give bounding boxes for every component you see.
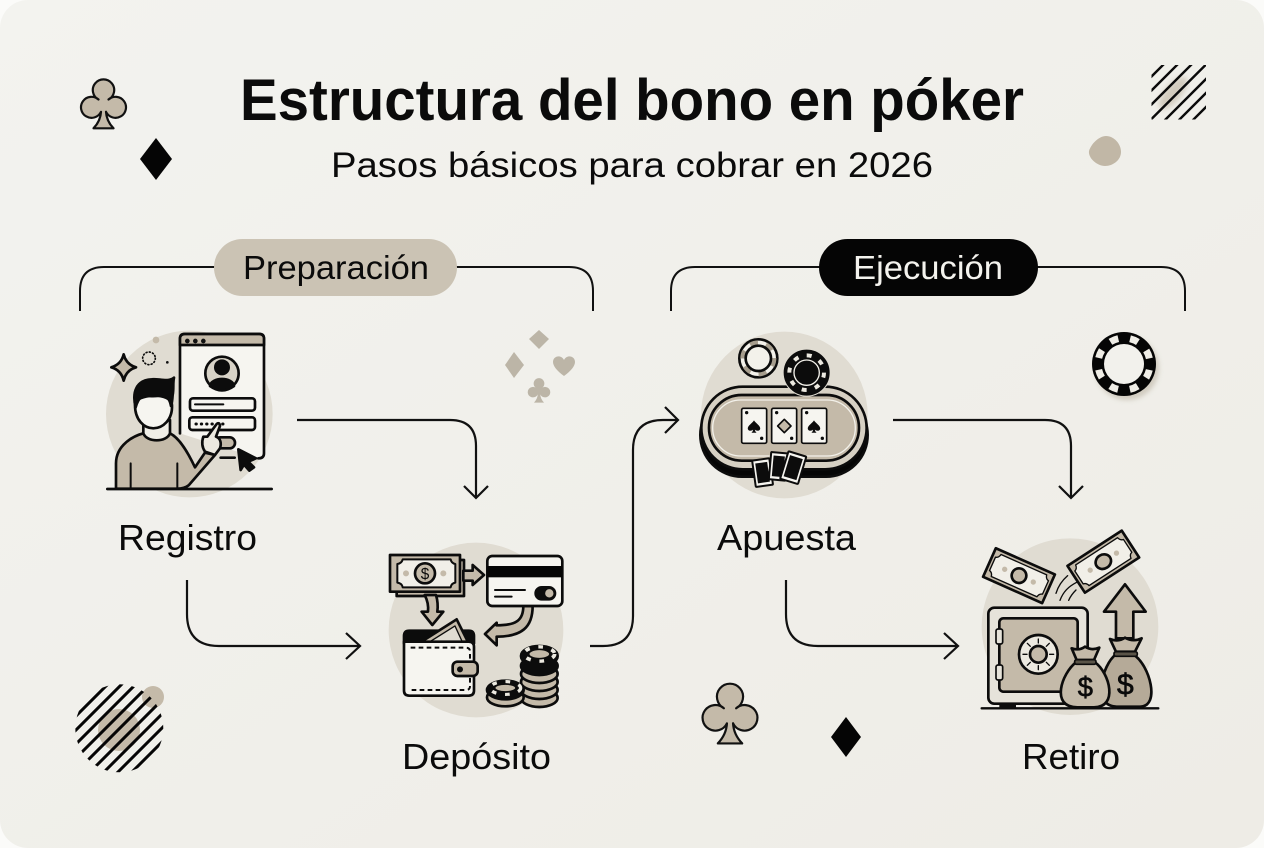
money bag front	[1061, 662, 1109, 707]
safe	[999, 701, 1016, 708]
title: Estructura del bono en póker	[240, 68, 1024, 133]
arrow: apuesta down to retiro	[786, 580, 958, 659]
decoration: black diamond top left	[140, 138, 172, 180]
pill: Ejecución	[819, 239, 1038, 296]
wallet	[404, 631, 474, 643]
chip stack small	[487, 681, 524, 706]
community cards	[742, 408, 827, 443]
arrow: registro down to depósito	[187, 580, 360, 659]
person	[116, 433, 215, 489]
label: Apuesta: Apuesta	[717, 517, 857, 558]
tan chip	[739, 339, 777, 377]
label: Preparación: Preparación	[243, 249, 429, 286]
icon: withdrawal	[982, 531, 1158, 715]
section header: Preparación bracket	[80, 239, 593, 311]
table	[700, 393, 868, 477]
falling bill left	[983, 548, 1055, 603]
icon: withdrawal: $	[1078, 672, 1093, 703]
label: Ejecución: Ejecución	[853, 249, 1003, 286]
falling bill right	[1067, 531, 1139, 593]
chip stack large	[521, 646, 558, 707]
hand cards	[752, 451, 806, 487]
pill: Preparación	[214, 239, 457, 296]
decoration: hatch top right	[1152, 65, 1206, 120]
arrow: registro to depósito	[297, 420, 488, 498]
arrows	[463, 565, 484, 585]
icon: deposit: $	[421, 566, 430, 583]
money bag back	[1101, 654, 1151, 707]
decoration: club outline top left	[81, 79, 126, 128]
icon: poker table	[700, 332, 868, 498]
arrow: depósito to apuesta	[590, 407, 678, 646]
motion lines	[1056, 576, 1077, 600]
icon: withdrawal: $	[1117, 668, 1134, 701]
bills	[397, 560, 464, 596]
decoration: hatched circle bottom left	[75, 684, 164, 772]
decoration: club outline bottom	[703, 684, 757, 743]
icon: registration	[106, 331, 273, 497]
label: Registro: Registro	[118, 517, 257, 558]
decoration: suit cluster	[505, 330, 575, 403]
label: Depósito: Depósito	[402, 736, 551, 777]
decoration: poker chip	[1092, 332, 1159, 400]
card	[487, 556, 562, 606]
arrow: apuesta to retiro	[893, 420, 1083, 498]
black chip	[783, 349, 831, 397]
decoration: black diamond bottom	[831, 717, 861, 757]
arrow up	[1104, 584, 1146, 638]
decoration: tan blob top right	[1089, 136, 1121, 166]
label: Retiro: Retiro	[1022, 736, 1120, 777]
section header: Ejecución bracket	[671, 239, 1185, 311]
subtitle: Pasos básicos para cobrar en 2026	[331, 146, 933, 185]
icon: deposit	[389, 543, 563, 717]
